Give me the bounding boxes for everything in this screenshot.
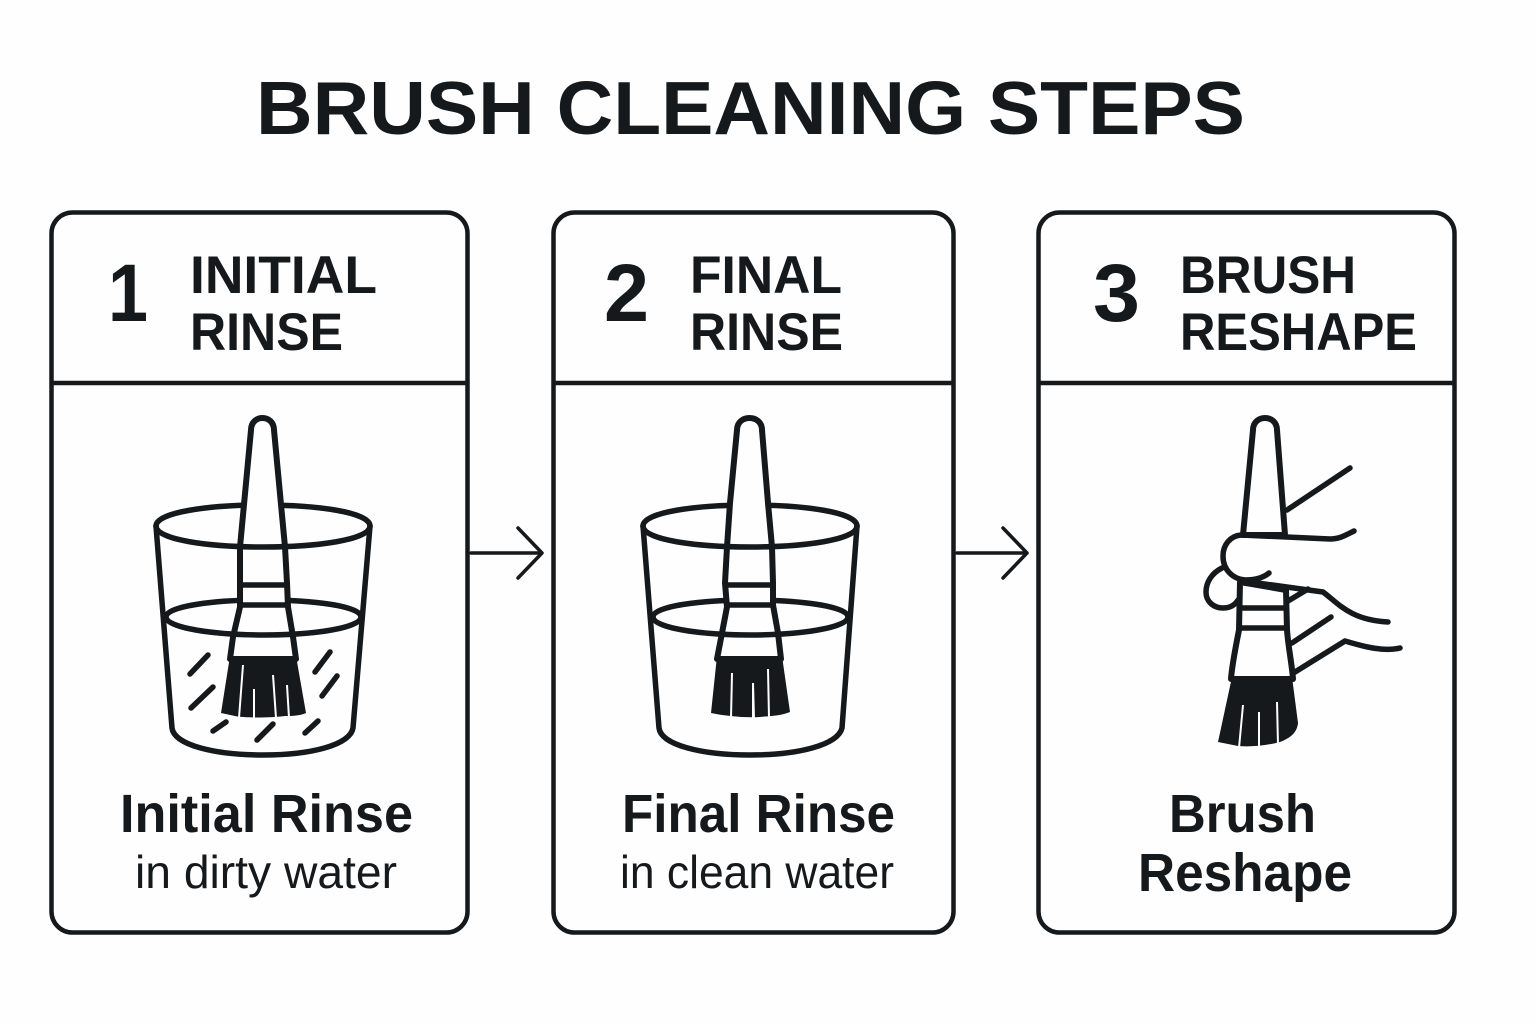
step number 1: 1: [108, 248, 148, 339]
step 1 caption: Initial Rinse: [120, 784, 413, 844]
panel: step 2 final rinse: [554, 212, 954, 932]
step 2 heading: FINAL: [690, 246, 842, 305]
panel 1 frame: [52, 212, 468, 932]
step 2 caption: [620, 784, 895, 898]
step 2 heading: RINSE: [690, 303, 843, 362]
step 3 heading: BRUSH: [1180, 246, 1356, 305]
brush bristles: [221, 656, 306, 718]
step 1 heading: [190, 246, 377, 362]
step 1 caption: [120, 784, 413, 898]
step 3 caption: Reshape: [1138, 843, 1352, 903]
panel 2 frame: [554, 212, 954, 932]
panel 3 frame: [1038, 212, 1454, 932]
icon: brush in dirty water glass: [156, 418, 370, 755]
step number 3: 3: [1093, 248, 1140, 339]
step 2 heading: [690, 246, 843, 362]
icon: hand reshaping brush: [1206, 418, 1400, 748]
step 1 heading: INITIAL: [190, 246, 377, 305]
brush bristles: [1218, 677, 1298, 746]
brush handle: [230, 418, 296, 659]
panel: step 3 brush reshape: [1038, 212, 1454, 932]
arrow: step 2 to step 3: [957, 528, 1027, 578]
icon: brush in clean water glass: [643, 418, 857, 755]
hand lines: [1287, 468, 1350, 510]
panel: step 1 initial rinse: [52, 212, 468, 932]
step 3 caption: Brush: [1169, 784, 1316, 844]
step 2 caption: Final Rinse: [622, 784, 895, 844]
step 3 caption: [1138, 784, 1352, 903]
dirt marks: [190, 652, 337, 740]
step 1 heading: RINSE: [190, 303, 343, 362]
arrow: step 1 to step 2: [471, 528, 542, 578]
step 3 heading: RESHAPE: [1180, 303, 1417, 362]
step 2 caption: in clean water: [620, 846, 894, 898]
brush handle: [1243, 418, 1285, 535]
title: BRUSH CLEANING STEPS: [256, 66, 1245, 150]
step 1 caption: in dirty water: [135, 846, 397, 898]
step number 2: 2: [604, 248, 649, 339]
step 3 heading: [1180, 246, 1417, 362]
brush bristles: [711, 656, 790, 717]
brush handle: [717, 418, 781, 659]
